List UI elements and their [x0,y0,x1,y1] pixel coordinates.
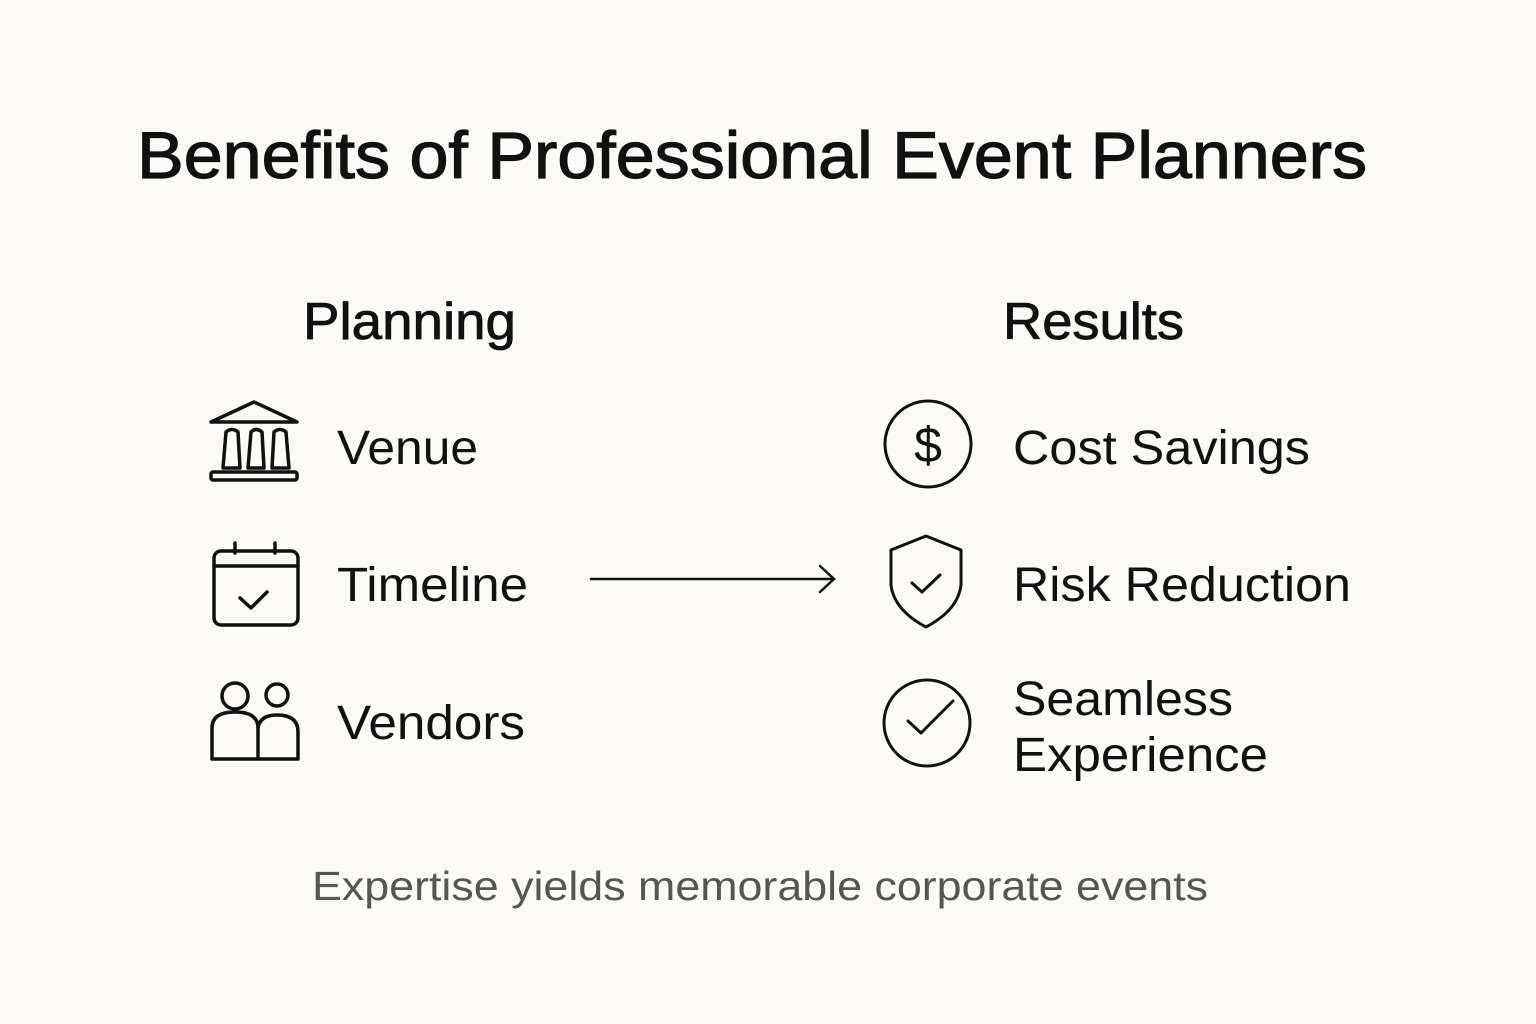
icon: calendar [214,543,298,625]
heading: planning: Planning [303,293,516,351]
icon: shield [891,536,961,627]
heading: results: Results [1003,293,1184,351]
icon: check circle [884,680,970,766]
panel: results items [884,401,1351,782]
label: seamless experience: Seamless [1013,673,1233,726]
label: seamless experience: Experience [1013,729,1268,782]
label: seamless experience [1013,673,1268,782]
icon: dollar: $ [914,417,942,473]
label: vendors: Vendors [337,697,525,750]
footer tagline: Expertise yields memorable corporate events [312,863,1208,909]
label: risk reduction: Risk Reduction [1013,559,1351,612]
panel: planning items [211,402,528,759]
label: venue: Venue [337,422,478,475]
label: cost savings: Cost Savings [1013,422,1310,475]
icon: dollar [885,401,971,487]
arrow [591,566,834,592]
label: timeline: Timeline [337,559,528,612]
title: Benefits of Professional Event Planners [137,118,1367,192]
icon: venue [211,402,297,480]
icon: vendors [212,683,298,759]
